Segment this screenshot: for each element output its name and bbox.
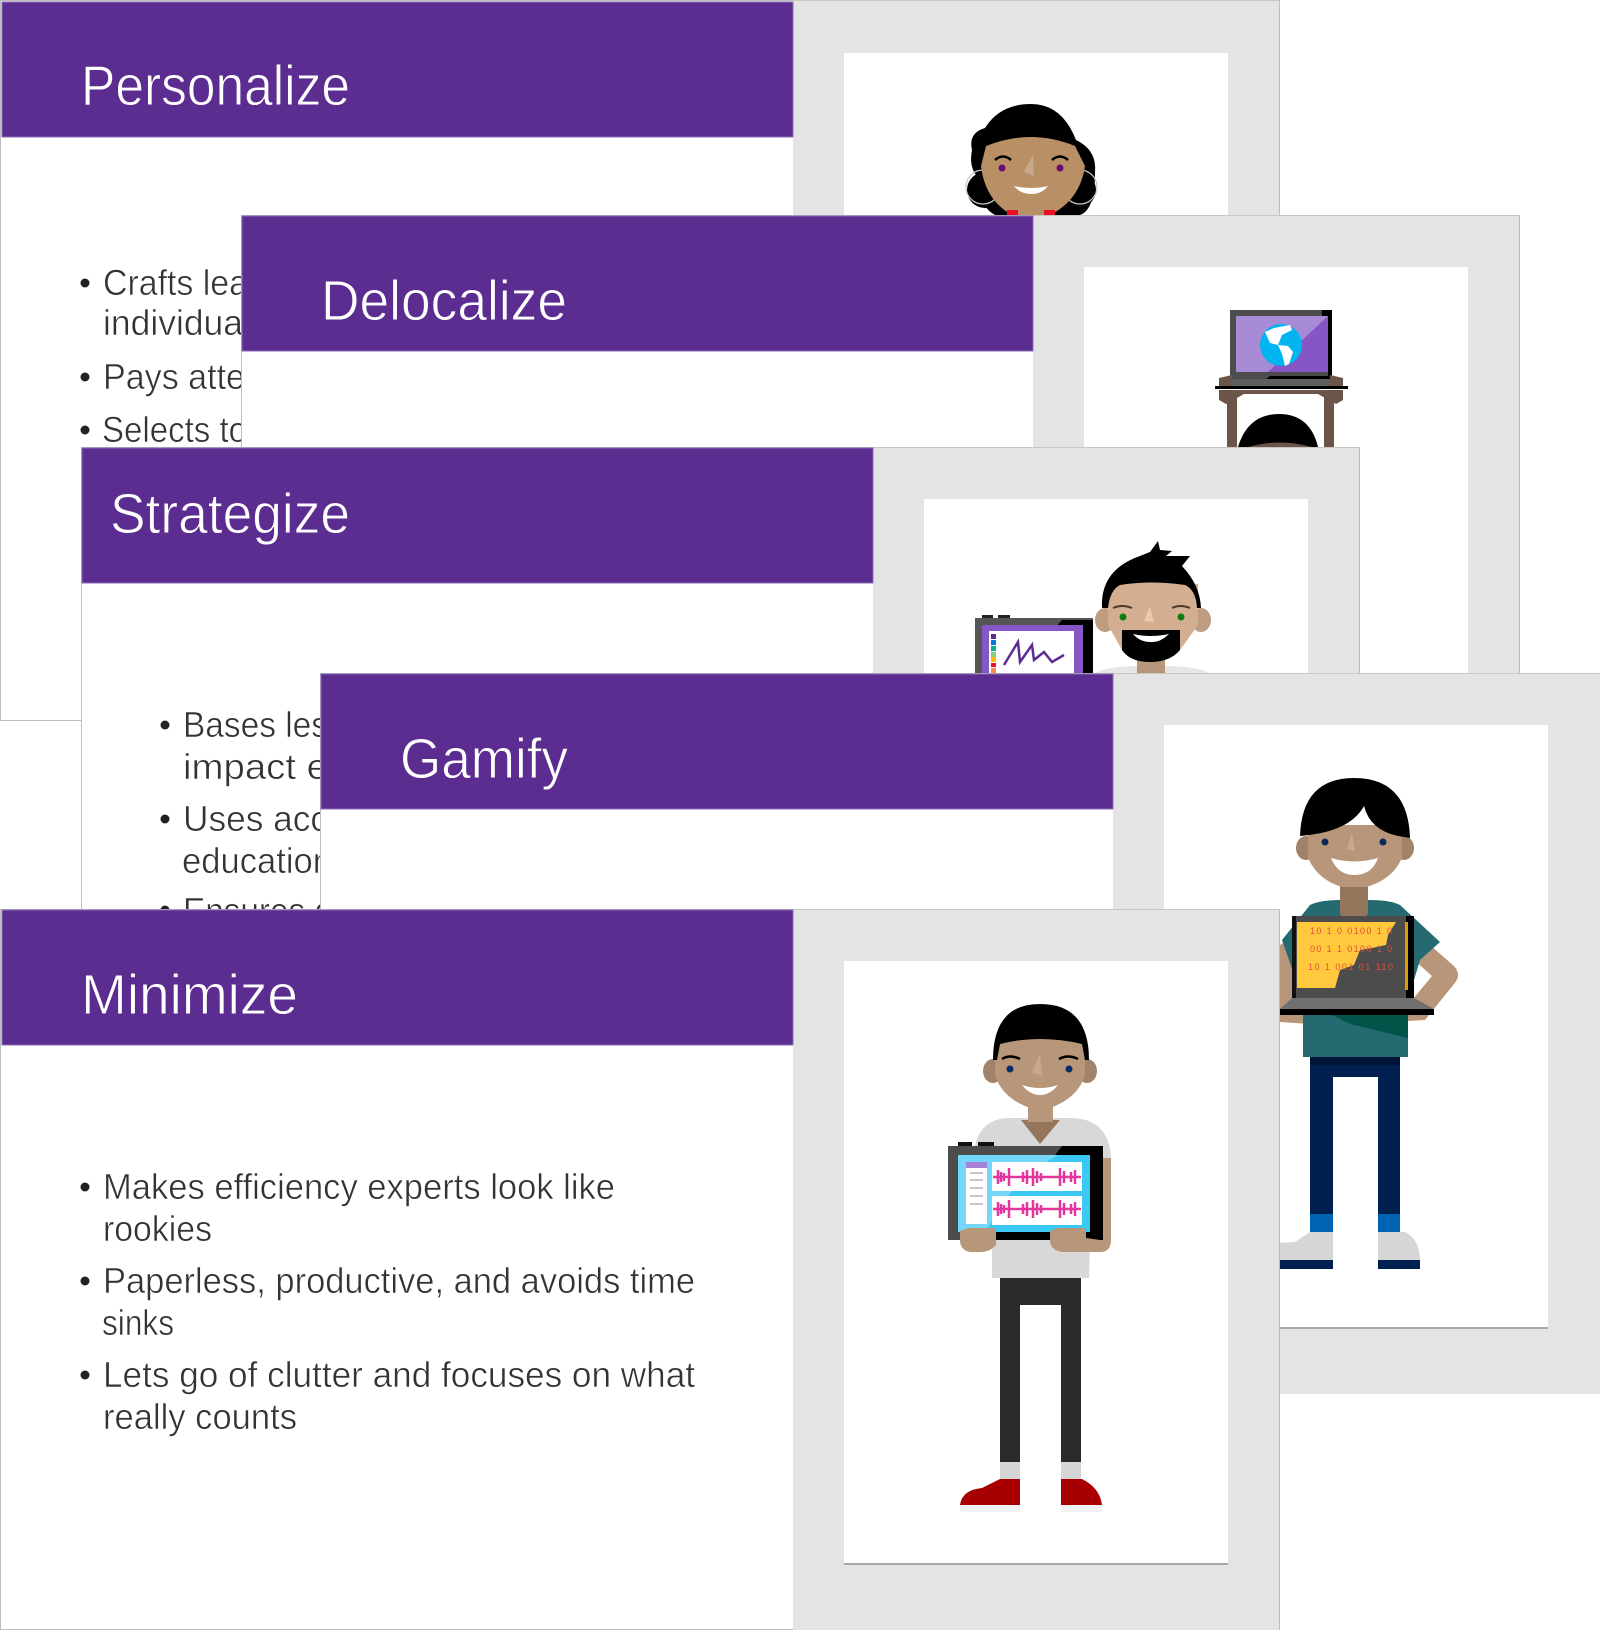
bullet list: Strategize: Uses acc — [183, 798, 328, 839]
colour swatches — [991, 634, 996, 673]
bullet list: Minimize: Lets go of clutter and focuses on what — [103, 1354, 695, 1395]
header bar: Delocalize — [242, 216, 1033, 351]
header bar: Minimize — [2, 910, 793, 1045]
bullet list: Personalize: Selects to — [102, 409, 247, 450]
shirt — [973, 1118, 1111, 1278]
hands — [960, 1228, 1100, 1252]
slide card: Gamify — [320, 673, 1600, 1394]
bullet list: Strategize: Bases les — [183, 704, 328, 745]
slide card: Strategize — [82, 447, 1360, 1168]
title: Delocalize: Delocalize — [321, 269, 567, 333]
laptop: 00 1 1 0100 1 0 — [1310, 944, 1392, 954]
head — [983, 1004, 1097, 1122]
bullet list: Strategize: Ensures d — [183, 890, 333, 931]
title: Personalize: Personalize — [81, 54, 350, 118]
bullet list: Minimize: Makes efficiency experts look like — [103, 1166, 615, 1207]
title: Minimize: Minimize — [81, 963, 298, 1027]
laptop: 10 1 0 0100 1 0 — [1310, 926, 1392, 936]
bullet list: Minimize — [80, 1166, 695, 1437]
bullet list: Personalize: individua — [103, 302, 244, 343]
head — [1296, 778, 1414, 918]
illustration: man with laptop showing binary — [1278, 778, 1458, 1269]
audio waveform — [993, 1168, 1081, 1218]
header bar: Strategize — [82, 448, 873, 583]
laptop — [1280, 916, 1434, 1015]
bullet list: Strategize — [160, 704, 333, 931]
slide card: Delocalize — [242, 215, 1520, 936]
slide card: Minimize — [0, 909, 1280, 1630]
header bar: Personalize — [2, 2, 793, 137]
illustration: woman with curly hair — [966, 104, 1097, 215]
bullet list: Minimize: rookies — [103, 1208, 212, 1249]
bullet list: Strategize: education — [182, 840, 332, 881]
laptop: 10 1 001 01 110 — [1308, 962, 1393, 972]
title: Gamify: Gamify — [400, 727, 568, 791]
title: Strategize: Strategize — [110, 482, 350, 546]
bullet list: Personalize: Crafts lea — [103, 262, 249, 303]
bullet list: Personalize — [80, 262, 249, 450]
bullet list: Minimize: sinks — [102, 1302, 174, 1343]
illustration: bearded man with drawing tablet — [975, 541, 1211, 673]
header bar: Gamify — [321, 674, 1113, 809]
tablet — [948, 1142, 1103, 1240]
illustration: person with laptop and globe — [1215, 310, 1348, 450]
bullet list: Personalize: Pays atte — [103, 356, 245, 397]
legs and shoes — [960, 1278, 1102, 1512]
arm — [1075, 1158, 1111, 1252]
shirt — [1282, 900, 1440, 1057]
legs and shoes — [1278, 1057, 1420, 1269]
slide card: Personalize — [0, 0, 1280, 721]
illustration: man with tablet showing audio waveform — [948, 1004, 1111, 1512]
bullet list: Strategize: impact e — [183, 746, 328, 787]
arm — [1385, 932, 1458, 1022]
bullet list: Minimize: Paperless, productive, and avoids time — [103, 1260, 695, 1301]
bullet list: Minimize: really counts — [103, 1396, 297, 1437]
